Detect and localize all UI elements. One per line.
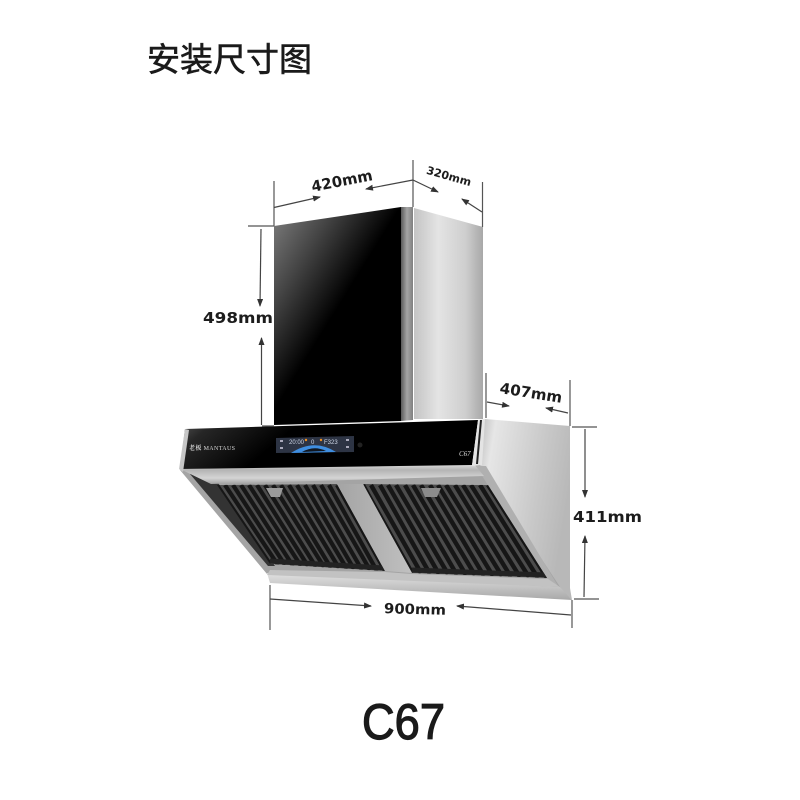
hood: front silver band — [180, 464, 484, 484]
dimension: 320mm depth — [413, 164, 482, 227]
dimension: 420mm width: 420mm — [310, 166, 374, 196]
filter: right grille — [363, 484, 547, 578]
brand logo: 老板 MANTAUS — [189, 444, 235, 452]
hood: front bottom lip — [267, 573, 572, 600]
range hood product illustration — [179, 207, 572, 600]
title: 安装尺寸图 — [147, 41, 312, 78]
model name: C67 — [362, 694, 445, 750]
hood: dark left inner wall — [190, 474, 275, 566]
model tag: C67 — [459, 450, 471, 458]
touch display: F323 — [324, 440, 338, 446]
handle: right filter — [421, 488, 441, 497]
dimension: 900mm width — [270, 585, 572, 630]
dimension: 420mm width — [274, 160, 413, 226]
hood: black control panel — [180, 420, 478, 469]
hood: central divider — [337, 484, 412, 573]
chimney: stainless steel side — [414, 208, 483, 419]
filter: left grille — [217, 484, 385, 571]
hood: right inner wall — [476, 466, 558, 586]
dimension: 407mm depth: 407mm — [498, 379, 564, 407]
hood: chrome right edge — [472, 419, 485, 466]
dimension: 498mm height — [203, 226, 274, 426]
chimney: black glass front — [274, 207, 401, 425]
dimension: 320mm depth: 320mm — [425, 164, 473, 189]
hood: stainless side panel — [475, 419, 572, 600]
chimney: metal corner strip — [401, 207, 413, 421]
hood: underside — [180, 465, 562, 590]
dimension: 411mm height — [572, 427, 642, 599]
dimension: 407mm depth — [486, 373, 570, 426]
dimension: 900mm width: 900mm — [384, 601, 446, 619]
touch display: 20:00 — [289, 440, 305, 446]
touch display — [276, 436, 362, 453]
touch display: 0 — [311, 440, 315, 446]
dimension: 411mm height: 411mm — [573, 508, 642, 526]
handle: left filter — [266, 488, 283, 497]
dimension: 498mm height: 498mm — [203, 309, 273, 327]
